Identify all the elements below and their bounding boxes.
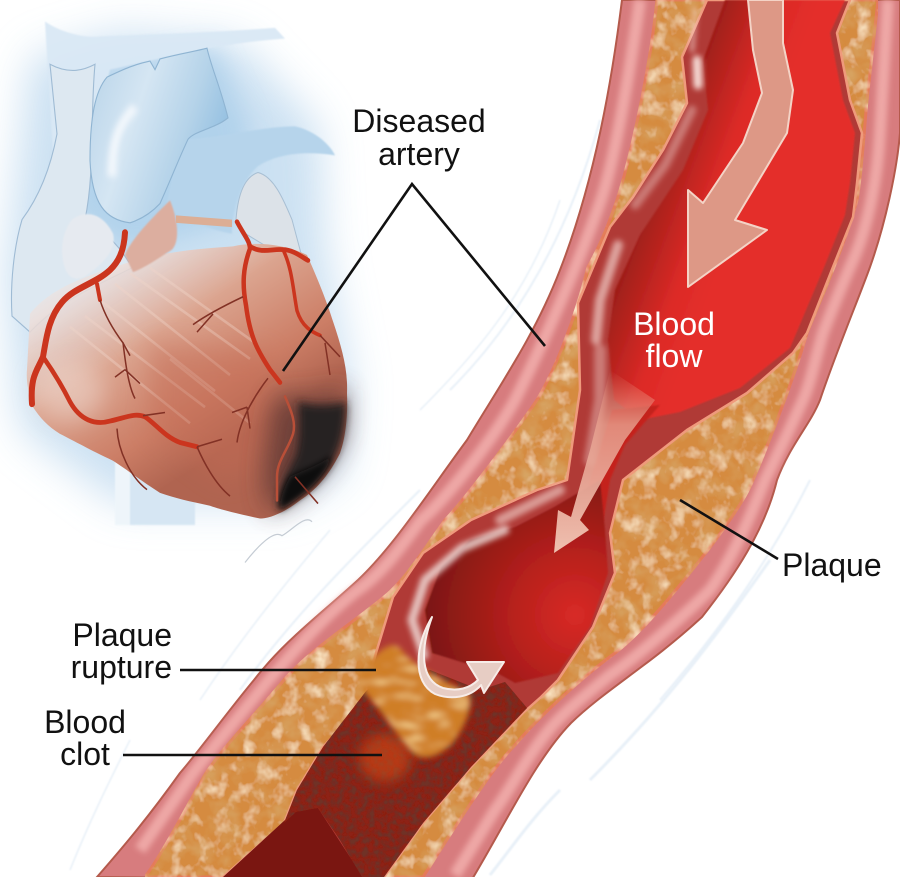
upper lumen blood: [608, 0, 855, 420]
small tapering flow arrow: [554, 370, 655, 553]
label: Plaque: Plaque: [782, 547, 882, 583]
leader lines from Diseased artery: [283, 184, 545, 371]
label: Plaque rupture: Plaque: [72, 617, 172, 653]
apex deepest black: [280, 455, 332, 510]
vessels behind heart: [45, 21, 285, 525]
large blood flow arrow: [688, 0, 793, 287]
label: Blood flow: flow: [646, 338, 703, 374]
label: Blood flow: [633, 306, 715, 374]
leader line to plaque: [680, 500, 778, 559]
stronger blue around great vessels: [70, 48, 250, 252]
small dark branch vessels: [100, 297, 340, 504]
label: Diseased artery: artery: [378, 136, 460, 172]
necrotic dark apex: [264, 388, 346, 512]
curved flow arrow: [418, 617, 504, 697]
label: Plaque rupture: [71, 617, 172, 685]
heart illustration: [5, 21, 352, 562]
ligament bar: [176, 215, 232, 227]
label: Diseased artery: Diseased: [352, 103, 486, 139]
leader line to blood clot: [123, 754, 382, 756]
lower pale smear: [412, 530, 505, 655]
blue glow behind heart: [5, 32, 352, 504]
superior vena cava and right atrium: [11, 64, 132, 332]
label: Blood clot: [44, 704, 126, 772]
pulmonary artery: [165, 126, 335, 234]
plaque rupture swirl: [359, 645, 470, 757]
label: Blood clot: clot: [60, 736, 110, 772]
pale wall smears: [500, 10, 698, 520]
lumen bright channel: [600, 404, 660, 517]
bottom lumen: [223, 805, 363, 877]
clot glow: [359, 734, 411, 782]
label: Blood flow: Blood: [633, 306, 715, 342]
left atrial appendage: [236, 172, 302, 257]
muscle shading: [70, 268, 255, 423]
label: Blood clot: Blood: [44, 704, 126, 740]
artist signature: [245, 520, 312, 562]
label: Plaque rupture: rupture: [71, 649, 172, 685]
coronary arteries: [32, 222, 320, 500]
label: Diseased artery: [352, 103, 486, 172]
right atrial appendage: [62, 214, 114, 279]
background wisps around the artery: [70, 120, 810, 875]
heart body: [27, 244, 347, 519]
pale left side of heart: [36, 361, 104, 421]
leader line to plaque rupture: [180, 669, 376, 671]
vessel lining: [223, 0, 862, 877]
aortic highlight: [112, 107, 135, 177]
pink stump of vessel: [125, 200, 177, 272]
lower lumen blood: [425, 480, 608, 683]
aorta: [90, 48, 228, 223]
warm shading at lower heart: [150, 343, 285, 482]
blood clot: [284, 670, 527, 877]
